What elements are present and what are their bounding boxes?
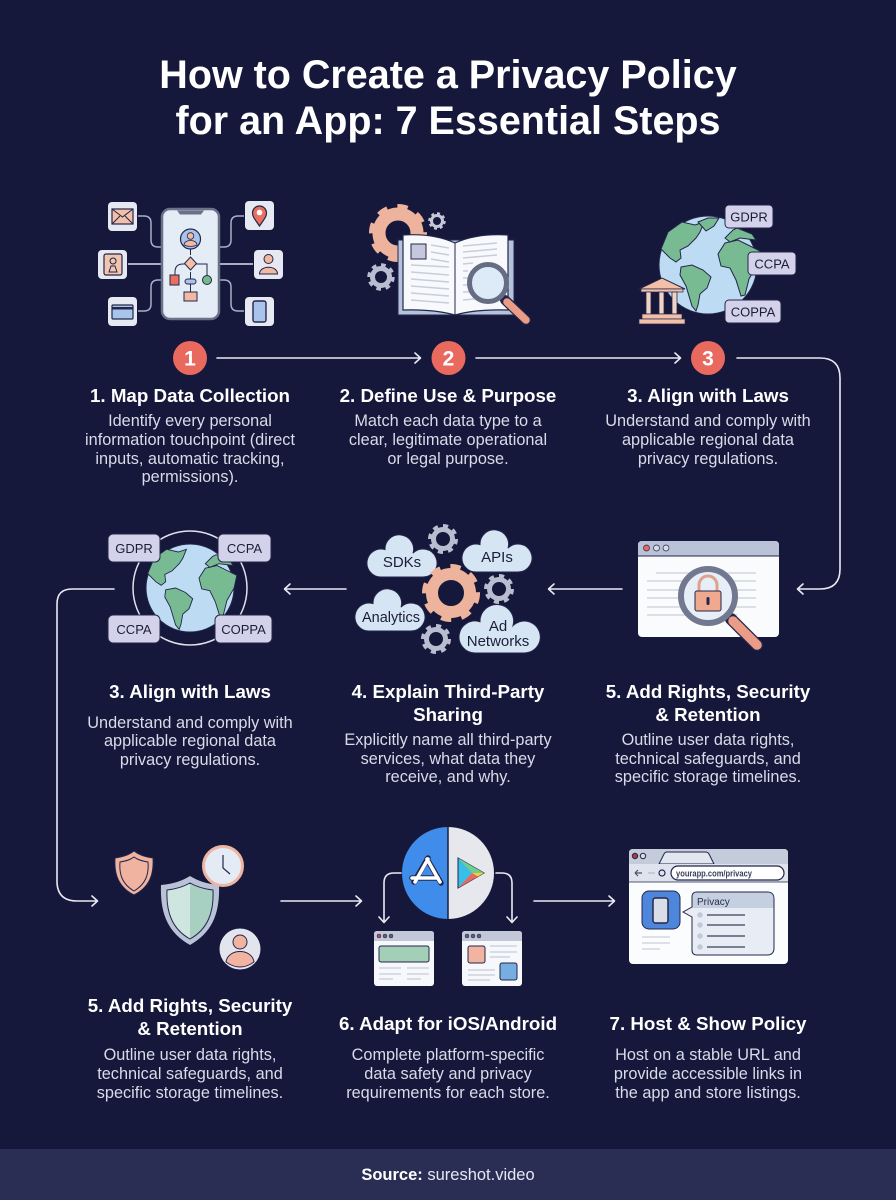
step 3 text: applicable regional data <box>622 431 795 449</box>
title: for an App: 7 Essential Steps <box>175 99 721 143</box>
step 2 text <box>340 385 556 468</box>
icon: third-party clouds and gears: SDKs <box>383 554 421 571</box>
icon: browser hosting privacy page: yourapp.com/privacy <box>676 868 752 878</box>
arrow: row 2 to row 3 <box>57 589 114 906</box>
step 3 text, row 2: privacy regulations. <box>120 751 260 769</box>
icon: browser with lock magnifier <box>638 541 779 645</box>
step 7 text: provide accessible links in <box>614 1065 802 1083</box>
icon: globe with regulation ring <box>108 531 272 645</box>
step 4 text: receive, and why. <box>385 768 511 786</box>
step 5 text, row 3: 5. Add Rights, Security <box>88 995 293 1016</box>
footer source bar: Source: sureshot.video <box>361 1166 535 1184</box>
step 4 text <box>344 681 552 786</box>
step 5 text: specific storage timelines. <box>615 768 801 786</box>
arrow: row 2 middle to left <box>284 584 346 594</box>
step 5 text, row 3: & Retention <box>137 1018 243 1039</box>
icon: globe with regulation ring: COPPA <box>221 622 266 637</box>
step number 1 <box>173 341 207 375</box>
step 5 text: & Retention <box>655 704 761 725</box>
icon: globe with regulations: CCPA <box>754 256 790 272</box>
icon: phone data map <box>98 201 283 326</box>
footer source bar <box>0 1149 896 1200</box>
step 1 text: Identify every personal <box>108 412 272 430</box>
step 3 text: Understand and comply with <box>605 412 811 430</box>
step 3 text, row 2: 3. Align with Laws <box>109 681 271 702</box>
step 5 text, row 3: Outline user data rights, <box>104 1046 276 1064</box>
step 1 text: permissions). <box>142 468 238 486</box>
step number 3: 3 <box>702 348 714 370</box>
arrow: row 3 left to middle <box>281 896 362 906</box>
step 5 text <box>606 681 811 786</box>
icon: globe with regulations: COPPA <box>731 304 776 320</box>
step 1 text: 1. Map Data Collection <box>90 385 290 406</box>
step 3 text, row 2: applicable regional data <box>104 732 277 750</box>
icon: third-party clouds and gears: APIs <box>481 549 513 566</box>
icon: globe with regulations: GDPR <box>730 210 768 224</box>
step 6 text <box>339 1013 557 1102</box>
arrow: step 2 to 3 <box>476 353 680 363</box>
step number 2 <box>432 341 466 375</box>
step 6 text: 6. Adapt for iOS/Android <box>339 1013 557 1034</box>
icon: globe with regulation ring: CCPA <box>116 622 152 637</box>
step 4 text: Sharing <box>413 704 483 725</box>
arrow: step 1 to 2 <box>217 353 420 363</box>
step 7 text: Host on a stable URL and <box>615 1046 801 1064</box>
step 1 text: information touchpoint (direct <box>85 431 295 449</box>
step 5 text: Outline user data rights, <box>622 731 794 749</box>
arrow: step 3 to row 2 <box>737 358 840 594</box>
icon: globe with regulation ring: GDPR <box>115 541 153 556</box>
step 3 text <box>605 385 811 468</box>
icon: globe with regulation ring: CCPA <box>227 541 262 556</box>
step 2 text: or legal purpose. <box>387 450 509 468</box>
title <box>159 53 737 143</box>
step 1 text: inputs, automatic tracking, <box>95 450 285 468</box>
step 3 text, row 2: Understand and comply with <box>87 714 293 732</box>
icon: browser hosting privacy page: Privacy <box>697 897 730 908</box>
step 3 text, row 2 <box>87 681 293 769</box>
step number 1: 1 <box>184 348 196 370</box>
step 7 text: 7. Host & Show Policy <box>610 1013 807 1034</box>
step 7 text: the app and store listings. <box>615 1084 801 1102</box>
icon: third-party clouds and gears: Networks <box>467 633 529 650</box>
step 4 text: 4. Explain Third-Party <box>352 681 545 702</box>
step 2 text: clear, legitimate operational <box>349 431 547 449</box>
icon: open book with gears and magnifier <box>369 207 526 320</box>
step 5 text: technical safeguards, and <box>615 750 801 768</box>
step 4 text: services, what data they <box>361 750 536 768</box>
step 1 text <box>85 385 295 486</box>
icon: shields, clock and user <box>115 846 260 970</box>
icon: browser hosting privacy page <box>629 849 788 964</box>
step 2 text: Match each data type to a <box>354 412 543 430</box>
step 3 text: 3. Align with Laws <box>627 385 789 406</box>
step 6 text: requirements for each store. <box>346 1084 550 1102</box>
icon: third-party clouds and gears: Ad <box>489 618 507 635</box>
arrow: row 3 middle to right <box>534 896 614 906</box>
step 2 text: 2. Define Use & Purpose <box>340 385 556 406</box>
step 6 text: Complete platform-specific <box>352 1046 544 1064</box>
icon: third-party clouds and gears <box>355 526 540 653</box>
arrow: row 2 right to middle <box>548 584 622 594</box>
step 5 text: 5. Add Rights, Security <box>606 681 811 702</box>
step 5 text, row 3: specific storage timelines. <box>97 1084 283 1102</box>
icon: app stores and listings <box>374 827 522 986</box>
icon: globe with regulations <box>639 205 796 324</box>
step 5 text, row 3: technical safeguards, and <box>97 1065 283 1083</box>
step number 2: 2 <box>443 348 454 370</box>
step 4 text: Explicitly name all third-party <box>344 731 552 749</box>
step number 3 <box>691 341 725 375</box>
title: How to Create a Privacy Policy <box>159 53 737 97</box>
step 7 text <box>610 1013 807 1102</box>
step 3 text: privacy regulations. <box>638 450 778 468</box>
icon: third-party clouds and gears: Analytics <box>362 610 420 626</box>
step 5 text, row 3 <box>88 995 293 1102</box>
step 6 text: data safety and privacy <box>364 1065 533 1083</box>
